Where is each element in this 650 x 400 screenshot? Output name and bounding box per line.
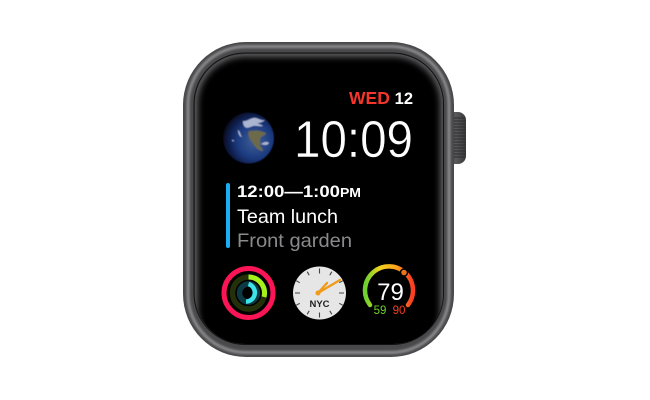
date: 12 (395, 90, 413, 108)
activity rings (224, 268, 273, 318)
event text (237, 183, 361, 252)
event time: 12:00—1:00 PM (237, 183, 361, 201)
high temperature: 90 (393, 305, 405, 317)
event title: Team lunch (237, 206, 338, 228)
temperature gauge (365, 266, 413, 317)
watch crown (447, 112, 466, 164)
dial ticks (295, 268, 344, 318)
date (349, 88, 413, 108)
apple watch infographic (183, 42, 466, 357)
date: WED (349, 88, 390, 108)
low temperature: 59 (374, 305, 386, 317)
watch screen (193, 52, 445, 362)
clock hands (316, 280, 340, 296)
watch case (183, 42, 454, 357)
current temperature: 79 (377, 279, 404, 306)
time: 10:09 (294, 111, 413, 169)
event accent bar (226, 183, 230, 248)
world clock dial (293, 266, 346, 320)
event location: Front garden (237, 230, 352, 252)
city label: NYC (309, 299, 330, 310)
icon: earth (223, 112, 274, 164)
